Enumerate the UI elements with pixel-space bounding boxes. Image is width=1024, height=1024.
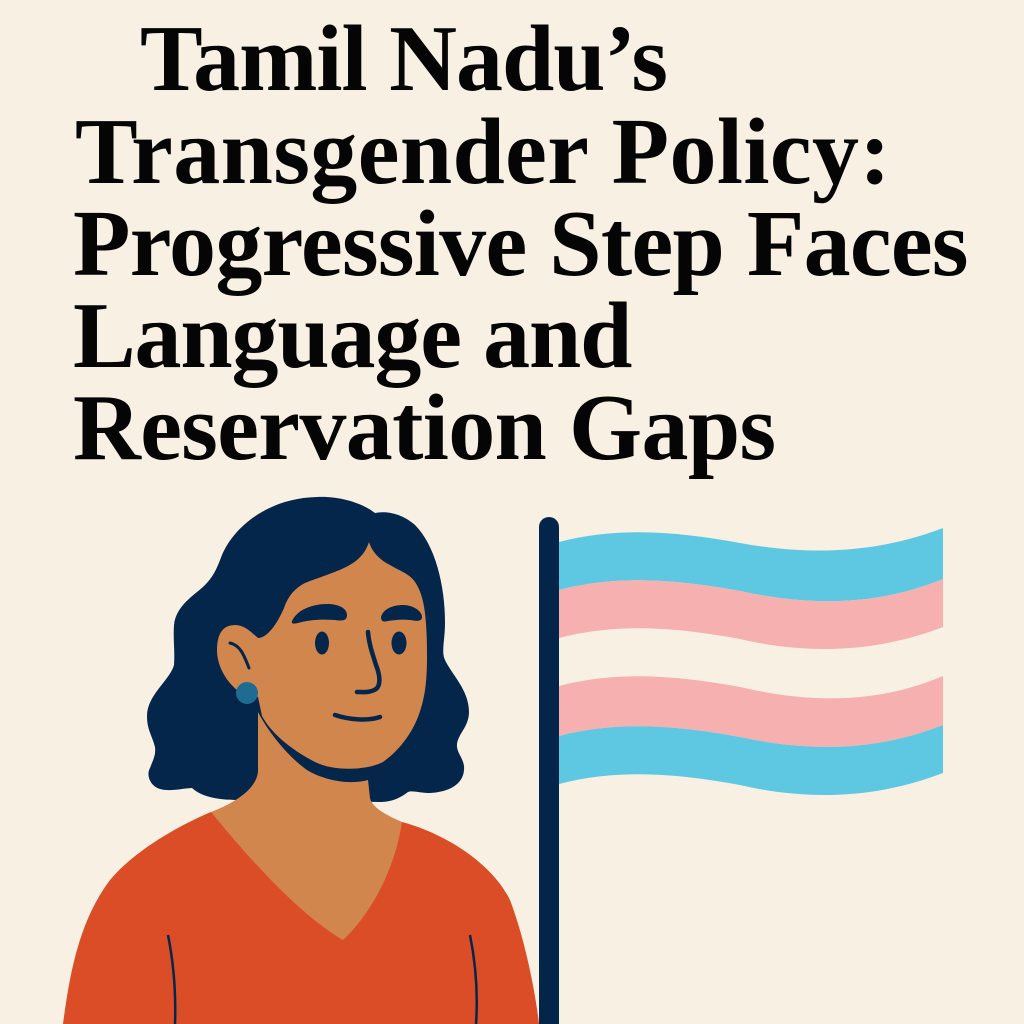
title: Transgender Policy: [75,100,891,204]
icon: person [63,497,539,1024]
neck and chest [211,712,402,940]
right eyebrow [381,605,422,622]
hair [147,497,469,802]
title: Reservation Gaps [73,376,775,480]
title: Progressive Step Faces [73,192,968,296]
sweater [63,812,539,1024]
flag pole [539,517,559,1024]
title: Language and [73,284,631,388]
left eyebrow [292,604,347,624]
left sleeve line [168,935,175,1024]
right eye [392,632,406,654]
earring [236,682,258,704]
left eye [315,632,329,654]
face [217,542,427,769]
nose [357,632,379,692]
right sleeve line [470,935,477,1024]
mouth [335,715,380,719]
title: Tamil Nadu’s [140,7,667,111]
icon: transgender flag [559,528,943,795]
ear line [230,643,249,668]
title [73,7,968,480]
